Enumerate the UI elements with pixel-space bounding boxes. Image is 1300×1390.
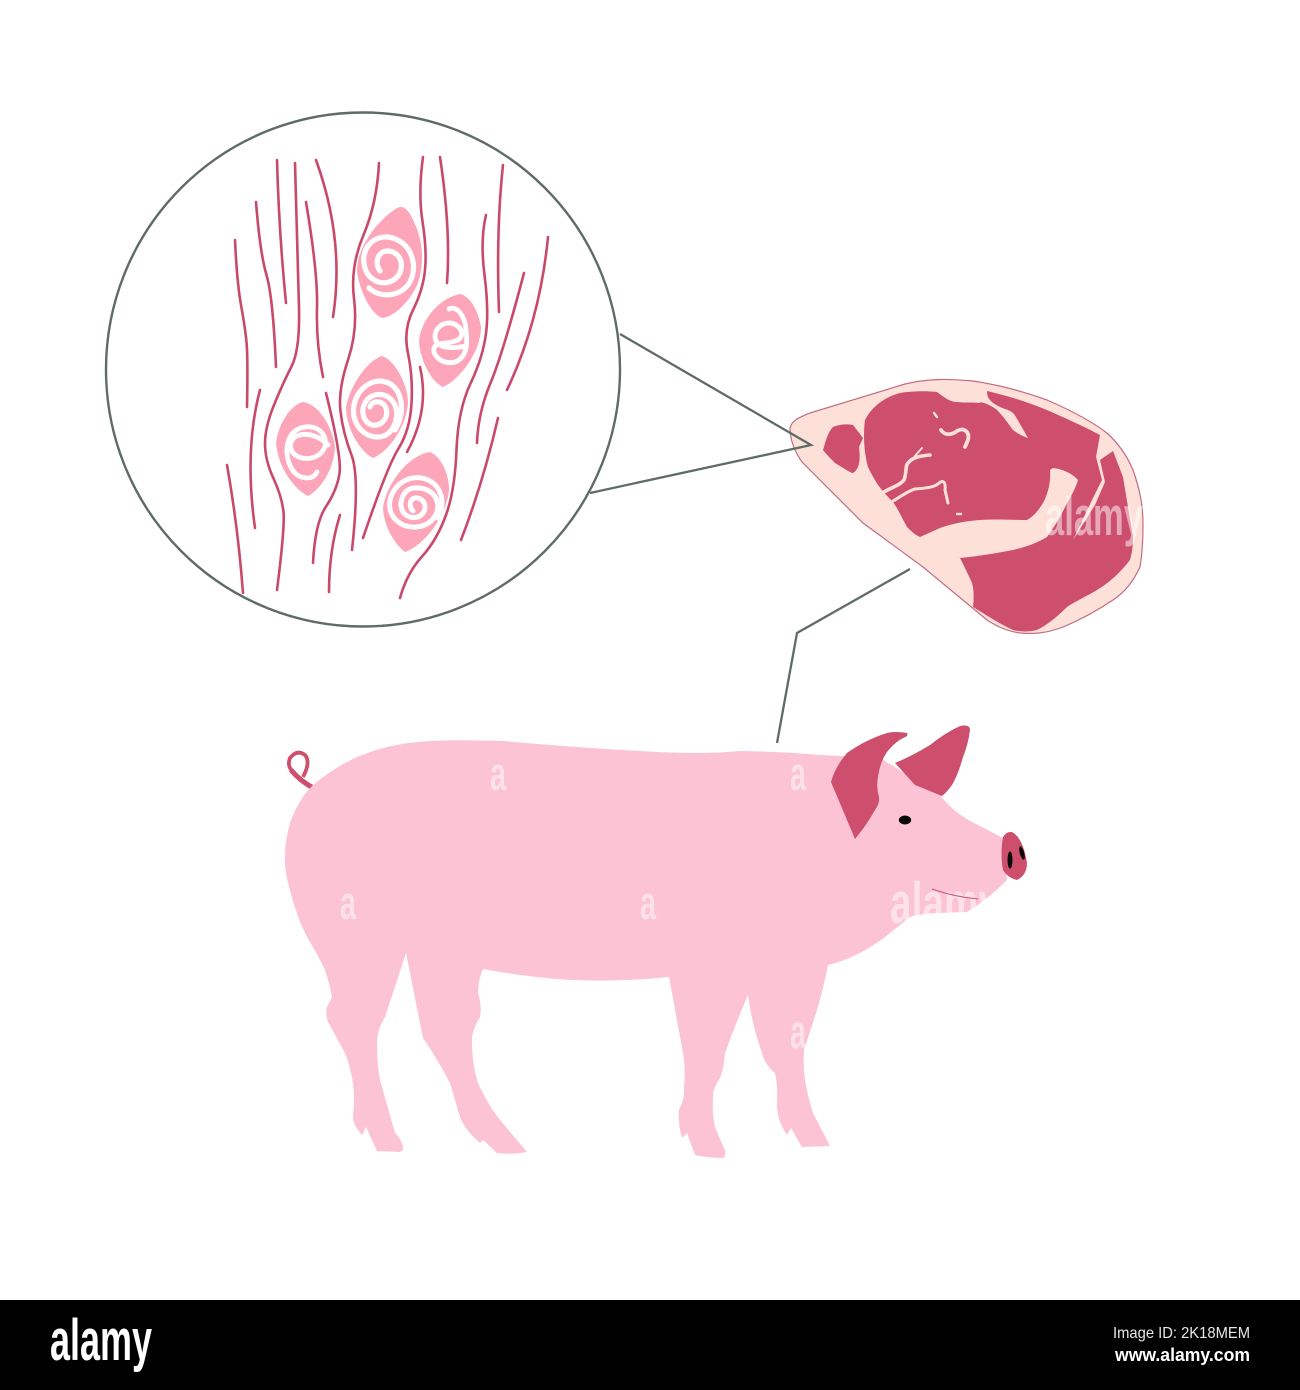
cyst: left	[276, 402, 335, 496]
small muscle	[823, 424, 863, 473]
website: www.alamy.com	[1114, 1345, 1250, 1365]
muscle fibres	[227, 157, 548, 598]
watermark letters: a	[790, 1005, 807, 1058]
cyst: bottom	[383, 452, 449, 552]
cyst: top	[357, 207, 422, 318]
watermark letters	[340, 747, 807, 1058]
connector lines from circle to meat	[590, 334, 811, 493]
nostrils	[1008, 846, 1026, 868]
eye	[899, 816, 911, 824]
pig	[285, 726, 1027, 1158]
connector line from meat to pig	[777, 569, 910, 743]
fat sliver upper	[957, 384, 1028, 438]
near ear	[831, 732, 908, 839]
footer bar	[0, 1300, 1300, 1390]
cyst: right	[419, 294, 481, 387]
fat band	[920, 468, 1078, 558]
watermark letters: a	[790, 747, 807, 800]
watermark letters: a	[340, 876, 357, 929]
fat veins	[884, 413, 968, 514]
magnifier circle	[106, 112, 620, 626]
footer logo: alamy	[50, 1308, 152, 1373]
snout	[1002, 832, 1027, 880]
cyst: centre	[346, 356, 408, 458]
main muscle	[864, 391, 1133, 632]
magnified muscle tissue panel	[106, 112, 620, 626]
watermark letters: a	[490, 747, 507, 800]
image id: Image ID: 2K18MEM	[1113, 1325, 1250, 1342]
watermark letters: a	[640, 876, 657, 929]
fat outline	[790, 379, 1143, 633]
far ear	[895, 726, 970, 796]
pig body	[285, 740, 1007, 1158]
tail	[289, 753, 315, 789]
mouth	[932, 889, 978, 899]
fat sliver right	[1073, 435, 1113, 540]
watermark on pig: alamy	[890, 871, 1000, 936]
watermark on meat: alamy	[1045, 485, 1143, 547]
meat cut	[790, 379, 1143, 633]
